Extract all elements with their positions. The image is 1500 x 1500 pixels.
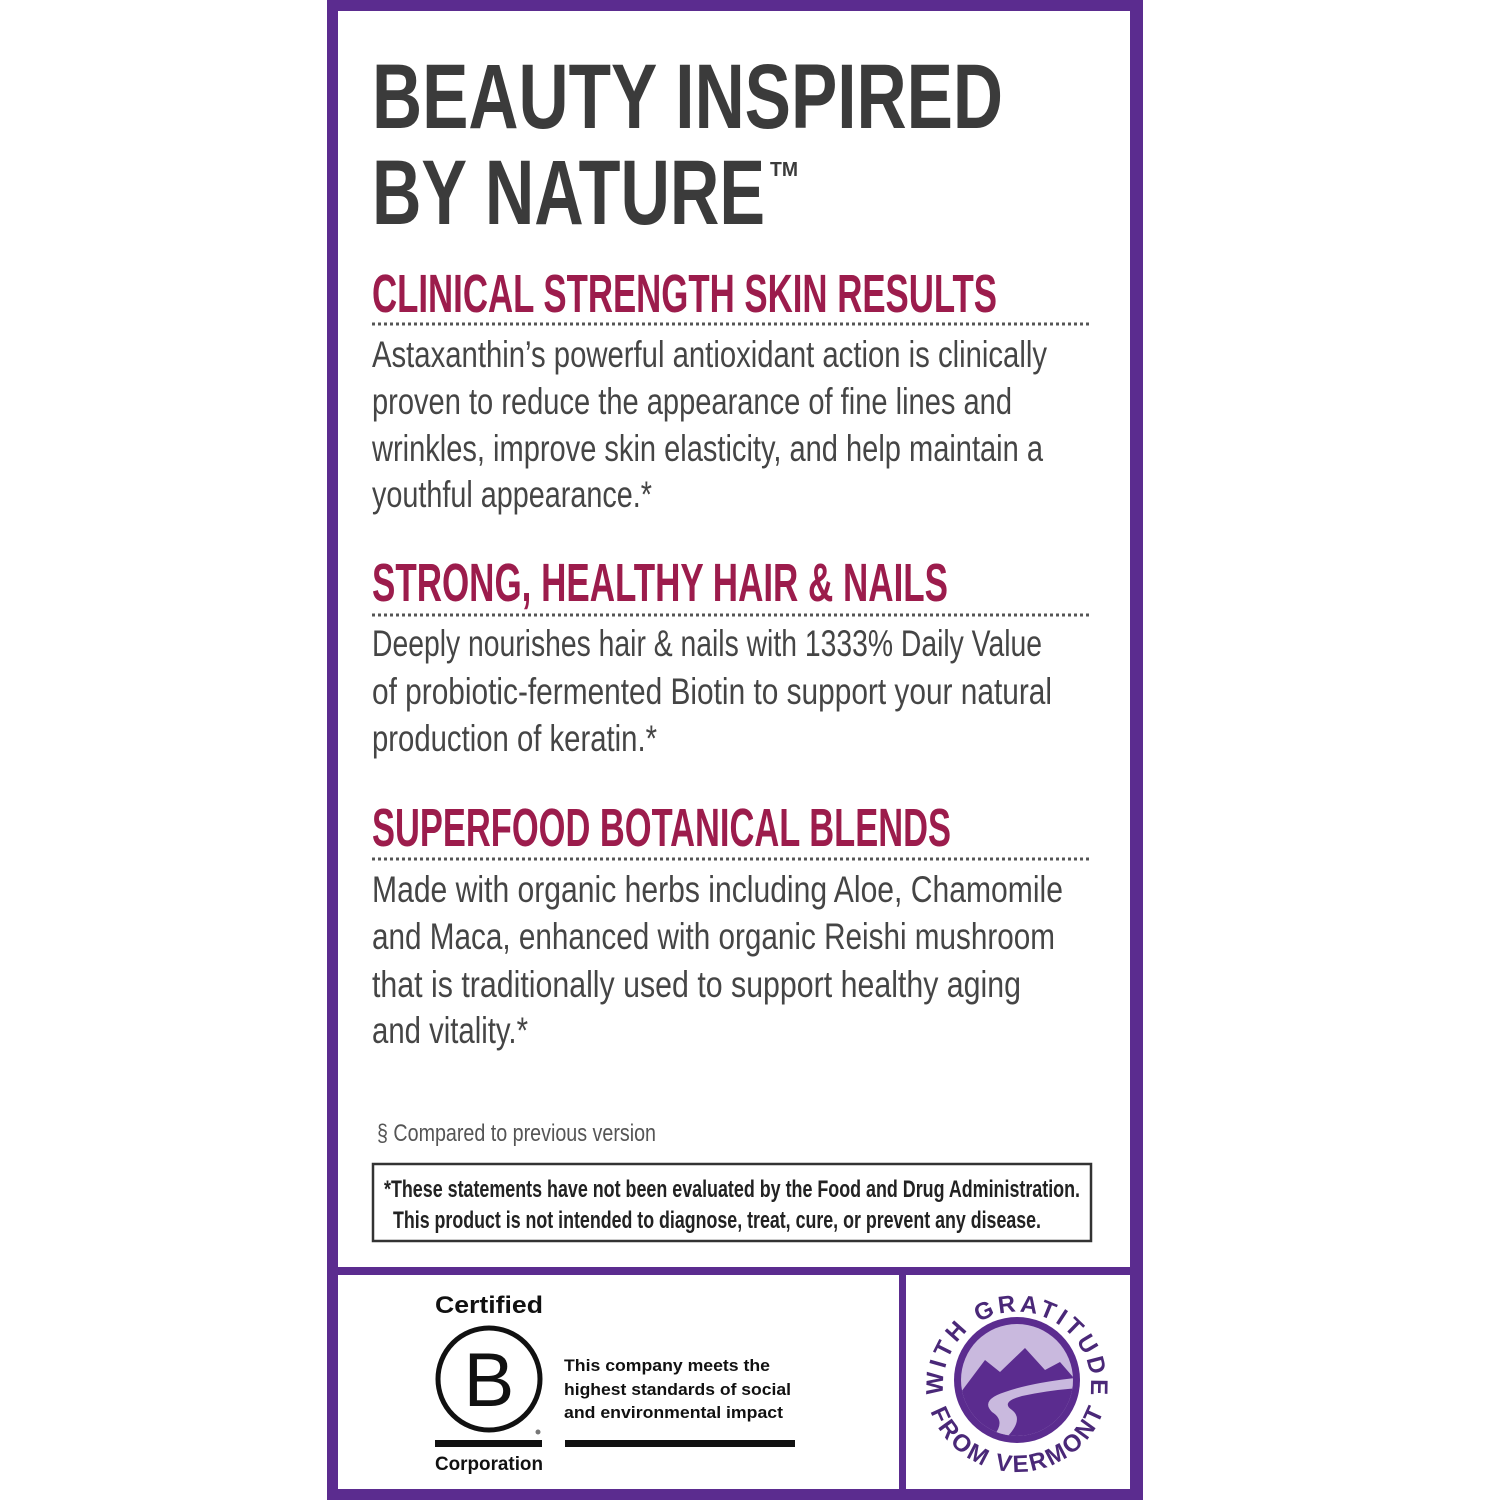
disclaimer box: *These statements have not been evaluated by the Food and Drug Administration. [384,1176,1080,1203]
frame: purple border [327,0,1143,1500]
body: hair [372,623,1052,759]
body: superfood [372,869,1063,1051]
icon: with gratitude from vermont seal: FROM VERMONT [930,1404,1102,1472]
B Corp certification: Certified [435,1292,543,1319]
body: clinical [371,334,1047,515]
body: hair: production of keratin.* [372,718,657,759]
body: superfood: and Maca, enhanced with organic Reishi mushroom [372,916,1055,957]
B Corp certification [435,1292,795,1475]
icon: with gratitude from vermont seal [926,1296,1108,1472]
body: hair: Deeply nourishes hair & nails with 1333% Daily Value [372,623,1042,664]
body: superfood: Made with organic herbs including Aloe, Chamomile [372,869,1063,910]
body: clinical: wrinkles, improve skin elasticity, and help maintain a [371,428,1043,469]
B Corp certification: This company meets the [564,1356,770,1375]
B Corp certification: and environmental impact [564,1403,783,1422]
title [372,46,1003,244]
body: superfood: that is traditionally used to support healthy aging [372,964,1021,1005]
icon: with gratitude from vermont seal: WITH GRATITUDE [926,1296,1108,1394]
title: BY NATURE [372,142,765,244]
heading: superfood: SUPERFOOD BOTANICAL BLENDS [372,798,951,858]
disclaimer box: This product is not intended to diagnose, treat, cure, or prevent any disease. [393,1207,1041,1234]
title: TM [770,159,798,181]
heading: clinical: CLINICAL STRENGTH SKIN RESULTS [372,264,997,324]
footnote: § Compared to previous version [377,1120,656,1147]
body: clinical: youthful appearance.* [372,474,652,515]
section: hair & nails [372,553,1092,759]
section: superfood [372,798,1092,1051]
body: clinical: Astaxanthin’s powerful antioxidant action is clinically [372,334,1047,375]
B Corp certification: highest standards of social [564,1380,791,1399]
B Corp certification: Corporation [435,1454,543,1475]
section: clinical strength [371,264,1092,515]
body: superfood: and vitality.* [372,1010,528,1051]
title: BEAUTY INSPIRED [372,46,1003,148]
icon: B corp logo: B [464,1338,514,1423]
body: hair: of probiotic-fermented Biotin to support your natural [372,671,1052,712]
heading: hair: STRONG, HEALTHY HAIR & NAILS [372,553,948,613]
body: clinical: proven to reduce the appearance of fine lines and [372,381,1012,422]
icon: B corp logo [438,1328,540,1434]
disclaimer box [373,1164,1091,1241]
